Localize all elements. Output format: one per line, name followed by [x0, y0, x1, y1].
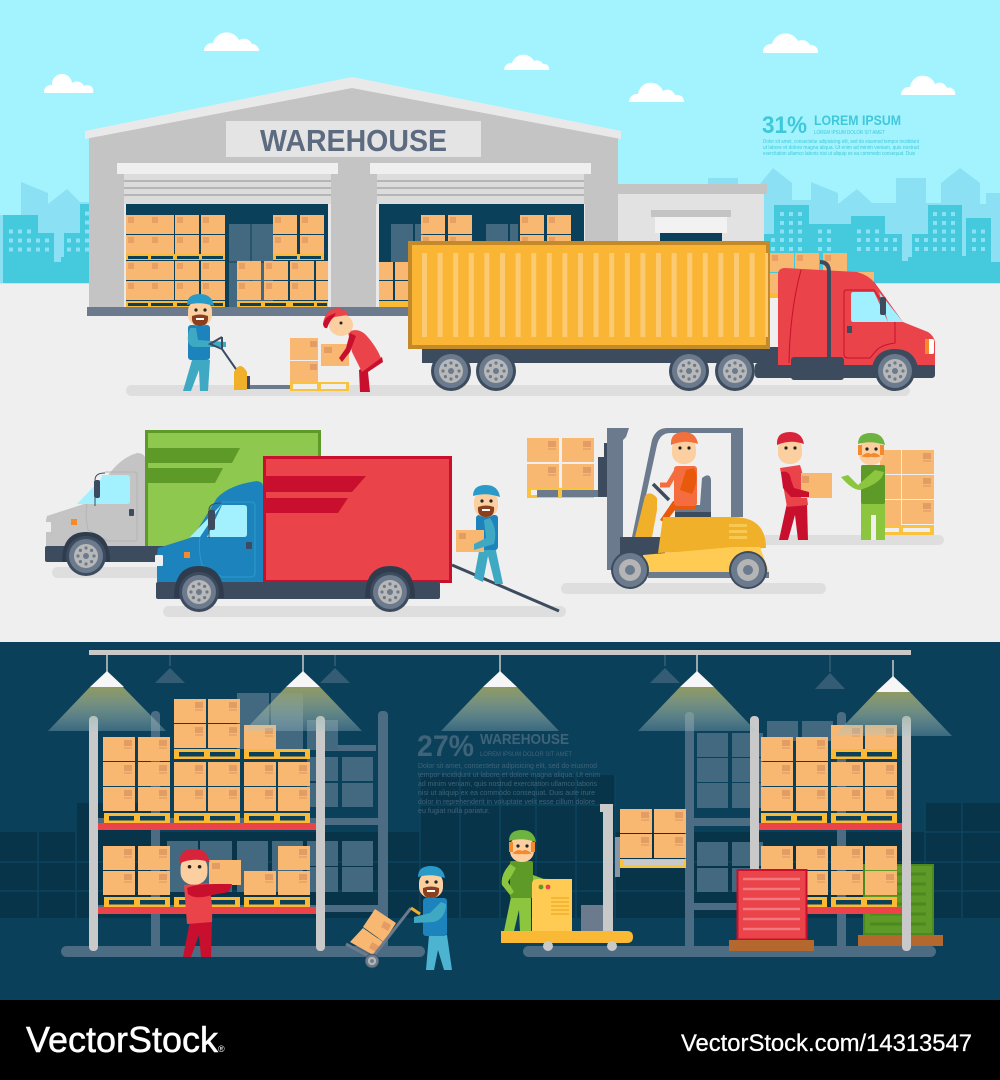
text block: 27% warehouse: eu fugiat nulla pariatur. [418, 806, 490, 815]
truck wheels [431, 351, 915, 391]
boxes behind green worker [870, 450, 934, 535]
interior back wall [0, 775, 1000, 918]
green crate [858, 865, 943, 946]
text block: 27% warehouse: dolor in reprehenderit in voluptate velit esse cillum dolore [418, 797, 595, 806]
clouds [44, 32, 955, 102]
pallet jack [210, 337, 294, 390]
text block: 31% lorem ipsum: exercitation ullamco laboris nisi ut aliquip ex ea commodo consequat. Duis [763, 151, 915, 157]
text block: 31% lorem ipsum: LOREM IPSUM [814, 113, 901, 128]
ceiling rail [89, 650, 911, 655]
worker: green with electric stacker [502, 830, 549, 931]
city skyline front [3, 204, 1000, 283]
small dark lamps [155, 655, 845, 689]
text block: 31% lorem ipsum: LOREM IPSUM DOLOR SIT AMET [814, 130, 886, 136]
text block: 27% warehouse: 27% [417, 730, 474, 763]
warehouse sign: WAREHOUSE [260, 123, 447, 158]
red crate [729, 870, 814, 951]
watermark bar: ® [218, 1044, 225, 1054]
boxes upper shelf [103, 699, 310, 823]
container truck [410, 243, 935, 391]
text block: 27% warehouse: WAREHOUSE [480, 731, 569, 748]
floor shadows [61, 946, 936, 957]
city skyline back [0, 168, 1000, 283]
ceiling lamps [48, 655, 952, 736]
text block: 27% warehouse: nisi ut aliquip ex ea commodo consequat. Duis aute irure [418, 788, 595, 797]
watermark bar: VectorStock.com/14313547 [681, 1030, 972, 1057]
door left [117, 163, 338, 308]
small annex building [618, 184, 767, 310]
warehouse interior background [0, 642, 1000, 1000]
boxes on pallet [290, 338, 349, 391]
text block: 27% warehouse: LOREM IPSUM DOLOR SIT AMET [480, 751, 572, 758]
ground shadow: top row [126, 385, 910, 396]
text block: 31% lorem ipsum: 31% [762, 112, 807, 139]
worker: blue with hand truck [346, 866, 452, 970]
ground shadow: workers [760, 535, 944, 545]
boxes on forks [527, 438, 607, 498]
text block: 27% warehouse: tempor incididunt ut labore et dolore magna aliqua. Ut enim [418, 770, 600, 779]
worker: red bending with box [321, 308, 383, 392]
blue truck with red box [155, 458, 566, 617]
watermark bar: VectorStock [26, 1019, 219, 1060]
right rack [729, 716, 911, 951]
ground [0, 284, 1000, 642]
boxes on stacker [620, 809, 686, 868]
forklift [598, 428, 769, 589]
boxes lower shelf [103, 846, 310, 907]
door right [370, 163, 591, 308]
boxes behind truck cab [770, 253, 874, 298]
watermark bar [0, 1000, 1000, 1080]
worker: green [841, 433, 885, 540]
city windows [9, 214, 990, 250]
text block: 31% lorem ipsum [762, 112, 920, 157]
worker: red reaching box on shelf [179, 849, 241, 957]
worker: blue with pallet jack [183, 294, 294, 391]
worker: red with box [777, 432, 832, 540]
hand truck [346, 908, 420, 968]
background racks [98, 693, 846, 950]
text block: 27% warehouse [417, 730, 600, 815]
text block: 31% lorem ipsum: Dolor sit amet, consectetur adipisicing elit, sed do eiusmod tempor incididunt [763, 139, 920, 145]
worker: blue carrying box on ramp [456, 485, 503, 584]
container [410, 243, 768, 347]
ramp [452, 565, 559, 611]
electric stacker [501, 804, 686, 951]
forklift driver [653, 432, 698, 523]
text block: 31% lorem ipsum: ut labore et dolore magna aliqua. Ut enim ad minim veniam, quis nostrud [763, 145, 919, 151]
text block: 27% warehouse: Dolor sit amet, consectetur adipisicing elit, sed do eiusmod [418, 761, 597, 770]
text block: 27% warehouse: ad minim veniam, quis nostrud exercitation ullamco laboris [418, 779, 597, 788]
warehouse building [85, 77, 621, 316]
red cab [778, 262, 935, 380]
sky background [0, 0, 1000, 285]
ground shadow: forklift [561, 583, 826, 594]
left rack [89, 699, 325, 951]
gray truck with green box [45, 432, 320, 578]
